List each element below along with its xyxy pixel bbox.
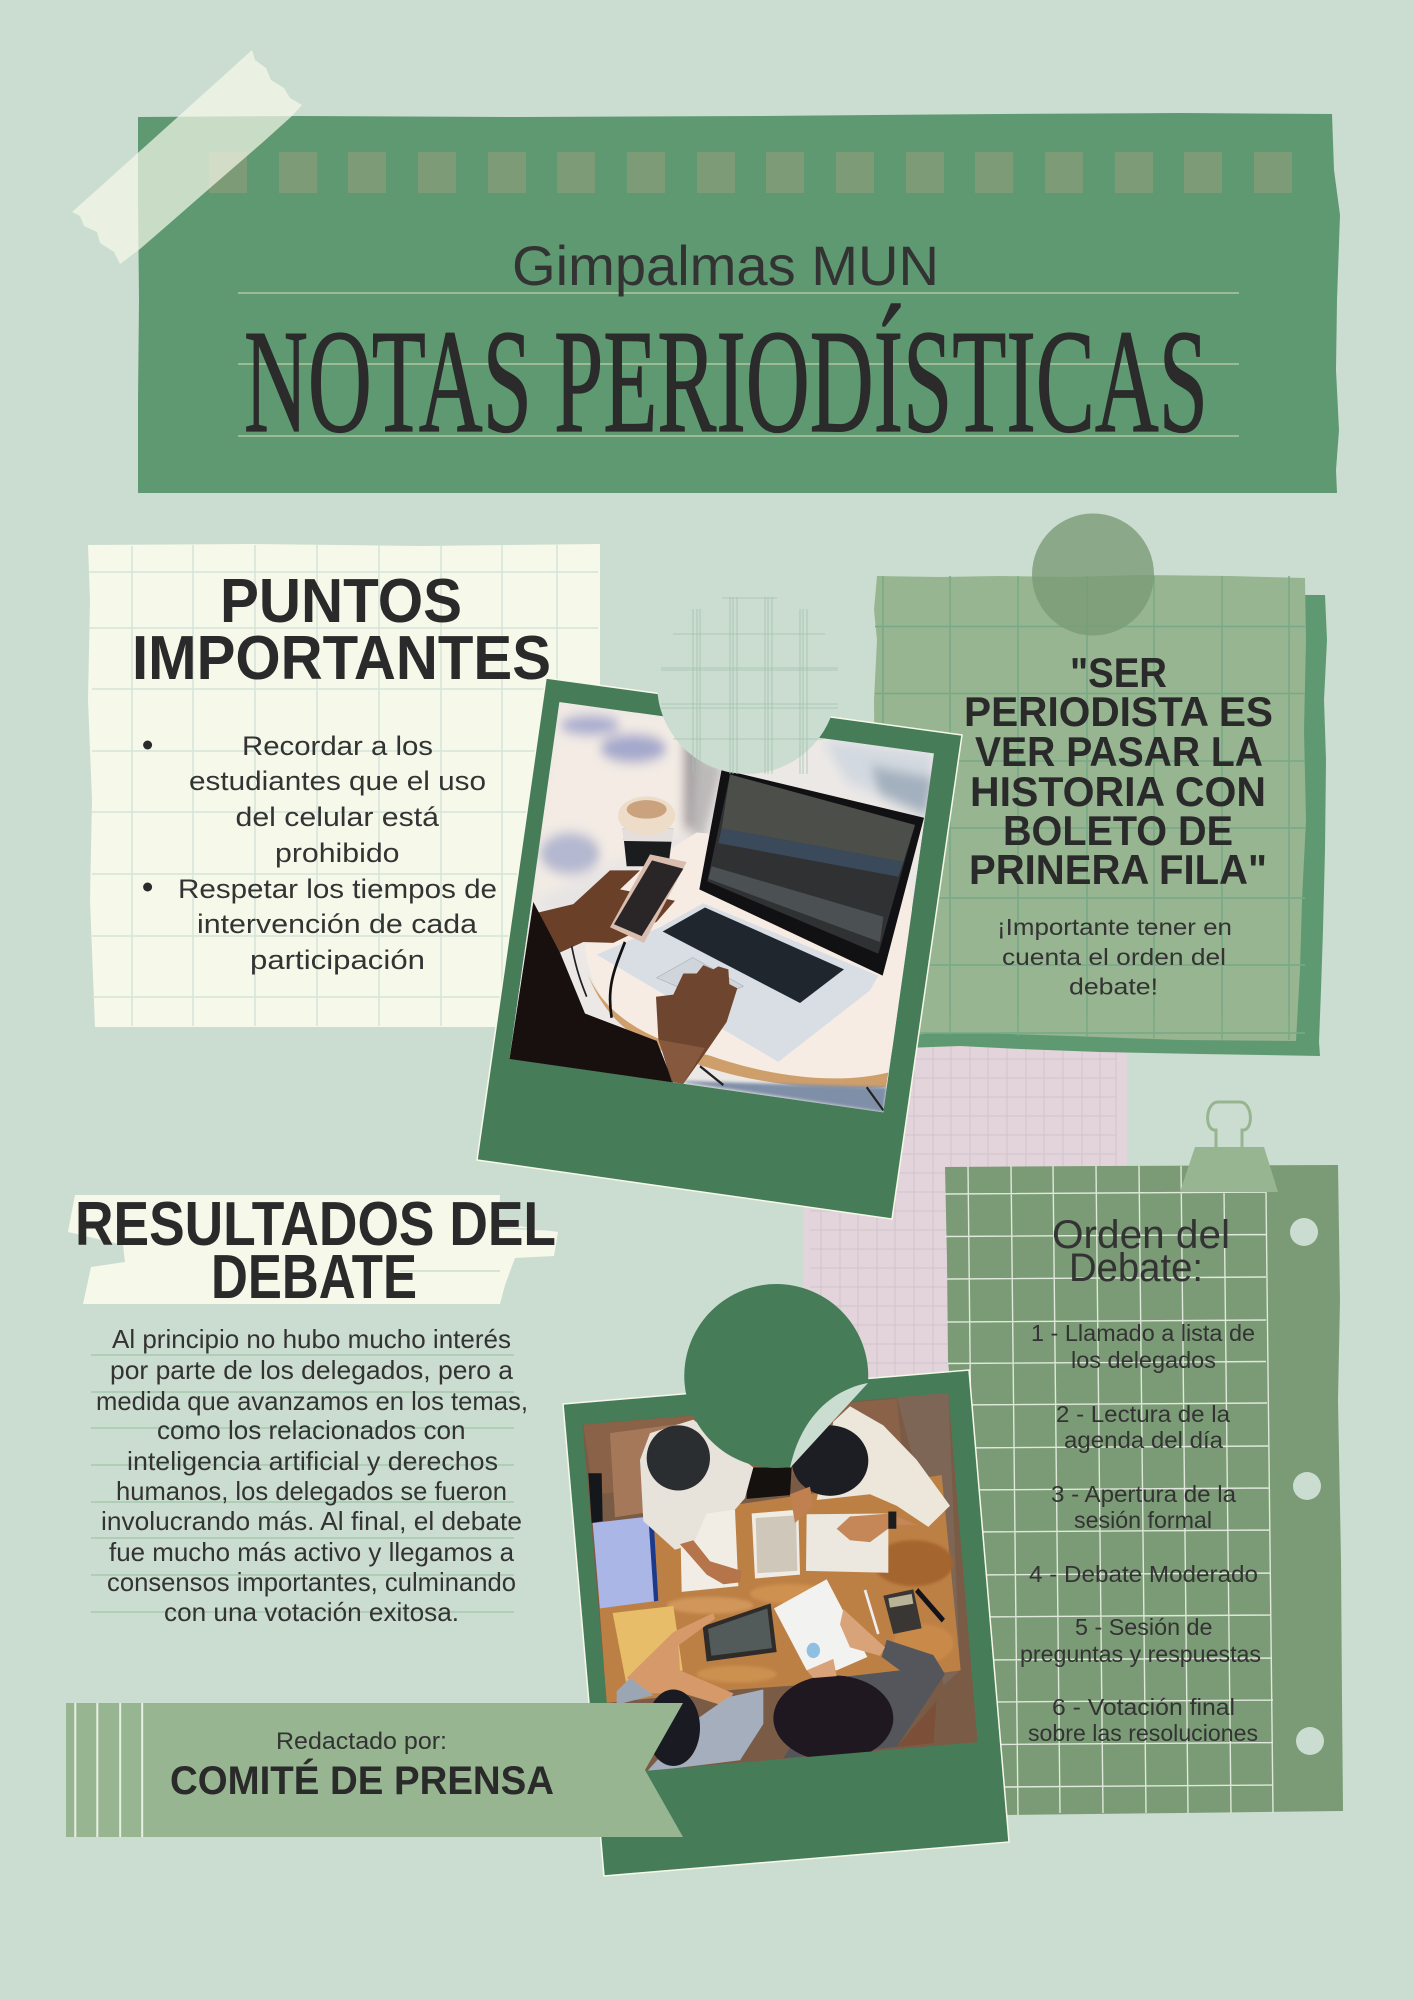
hand on trackpad bbox=[656, 965, 737, 1084]
panel: quote bbox=[874, 514, 1327, 1056]
photo: person with laptop and phone bbox=[509, 702, 934, 1112]
brush stroke bbox=[68, 1195, 558, 1304]
quote text: HISTORIA CON bbox=[970, 768, 1266, 815]
bullet list: intervención de cada bbox=[197, 909, 478, 939]
debate order list: los delegados bbox=[1071, 1347, 1216, 1373]
notepad heading: Debate: bbox=[1069, 1246, 1203, 1290]
quote text: PERIODISTA ES bbox=[964, 688, 1273, 735]
debate order list: 1 - Llamado a lista de bbox=[1031, 1320, 1255, 1346]
results heading: DEBATE bbox=[211, 1243, 417, 1312]
heading: IMPORTANTES bbox=[132, 624, 551, 693]
results heading: RESULTADOS DEL bbox=[75, 1190, 556, 1259]
bullet list: del celular está bbox=[236, 802, 440, 832]
debate order list bbox=[1020, 1320, 1261, 1746]
debate order list: 3 - Apertura de la bbox=[1051, 1481, 1236, 1507]
results text block: fue mucho más activo y llegamos a bbox=[109, 1537, 515, 1567]
results text block: involucrando más. Al final, el debate bbox=[101, 1506, 522, 1536]
results text block: humanos, los delegados se fueron bbox=[116, 1476, 507, 1506]
quote note: cuenta el orden del bbox=[1002, 944, 1226, 970]
credit name: COMITÉ DE PRENSA bbox=[170, 1758, 554, 1803]
heading: PUNTOS bbox=[220, 567, 462, 636]
credit label: Redactado por: bbox=[276, 1728, 447, 1755]
results heading bbox=[68, 1190, 558, 1312]
washi tape bbox=[72, 50, 302, 264]
person bottom left bbox=[627, 1613, 733, 1707]
notepad heading: Orden del bbox=[1052, 1213, 1230, 1257]
debate order list: agenda del día bbox=[1064, 1427, 1223, 1453]
results text block: con una votación exitosa. bbox=[164, 1597, 459, 1627]
results text block: medida que avanzamos en los temas, bbox=[96, 1386, 528, 1416]
papers and devices bbox=[680, 1510, 738, 1592]
debate order list: 5 - Sesión de bbox=[1075, 1614, 1212, 1640]
icon: binder clip bbox=[1180, 1102, 1278, 1192]
bullet list: participación bbox=[250, 945, 425, 975]
bullet list: Recordar a los bbox=[242, 731, 433, 761]
quote back sheet bbox=[905, 594, 1327, 1056]
debate order list: sobre las resoluciones bbox=[1028, 1720, 1258, 1746]
results text block: Al principio no hubo mucho interés bbox=[112, 1324, 511, 1354]
bullet list: estudiantes que el uso bbox=[189, 766, 486, 796]
quote note: debate! bbox=[1069, 974, 1158, 1000]
photo: team meeting from above bbox=[582, 1393, 978, 1774]
binder holes bbox=[1290, 1218, 1324, 1755]
table top bbox=[585, 833, 917, 1080]
quote note bbox=[997, 914, 1232, 1000]
debate order list: 6 - Votación final bbox=[1052, 1694, 1235, 1720]
decorative circle bbox=[1032, 514, 1154, 636]
quote text bbox=[964, 649, 1273, 893]
debate order list: 2 - Lectura de la bbox=[1056, 1401, 1230, 1427]
bullet list: prohibido bbox=[275, 838, 400, 868]
decorative circle cut-out bbox=[657, 594, 837, 774]
debate order list: sesión formal bbox=[1074, 1507, 1212, 1533]
wooden table bbox=[593, 1475, 961, 1703]
bullet list bbox=[143, 731, 497, 975]
person top right bbox=[817, 1406, 950, 1527]
panel: orden del debate notepad bbox=[945, 1165, 1343, 1815]
person bottom right bbox=[783, 1640, 945, 1758]
heading bbox=[132, 567, 551, 693]
results text block: como los relacionados con bbox=[157, 1415, 466, 1445]
results text block: por parte de los delegados, pero a bbox=[110, 1355, 514, 1385]
quote text: PRINERA FILA" bbox=[969, 846, 1267, 893]
pink grid paper bbox=[803, 1040, 1127, 1390]
debate order list: preguntas y respuestas bbox=[1020, 1641, 1261, 1667]
coffee cup bbox=[623, 828, 673, 866]
polaroid: meeting photo bbox=[563, 1370, 1009, 1876]
results text block bbox=[91, 1324, 528, 1627]
decorative sketch grid bbox=[661, 597, 838, 774]
results text block: consensos importantes, culminando bbox=[107, 1567, 516, 1597]
quote text: BOLETO DE bbox=[1003, 807, 1233, 854]
panel: puntos importantes bbox=[88, 544, 600, 1027]
person top left bbox=[640, 1420, 753, 1550]
sleeve bbox=[509, 902, 673, 1083]
subtitle: Gimpalmas MUN bbox=[512, 234, 939, 297]
bullet list: Respetar los tiempos de bbox=[178, 874, 497, 904]
quote text: "SER bbox=[1070, 649, 1167, 696]
results text block: inteligencia artificial y derechos bbox=[127, 1446, 498, 1476]
folders bbox=[593, 1517, 658, 1608]
quote front sheet bbox=[874, 575, 1306, 1041]
header panel bbox=[138, 113, 1340, 493]
quote text: VER PASAR LA bbox=[975, 728, 1263, 775]
polaroid: laptop photo bbox=[477, 678, 962, 1219]
laptop bbox=[699, 769, 924, 976]
debate order list: 4 - Debate Moderado bbox=[1029, 1561, 1258, 1587]
decorative dark circle with chord cut bbox=[684, 1284, 868, 1468]
banner: comité de prensa bbox=[66, 1703, 683, 1837]
phone and hand bbox=[538, 870, 675, 952]
notepad heading bbox=[1052, 1213, 1230, 1290]
crescent cut-out bbox=[790, 1383, 868, 1468]
quote note: ¡Importante tener en bbox=[997, 914, 1232, 940]
film strip squares bbox=[209, 152, 1292, 193]
